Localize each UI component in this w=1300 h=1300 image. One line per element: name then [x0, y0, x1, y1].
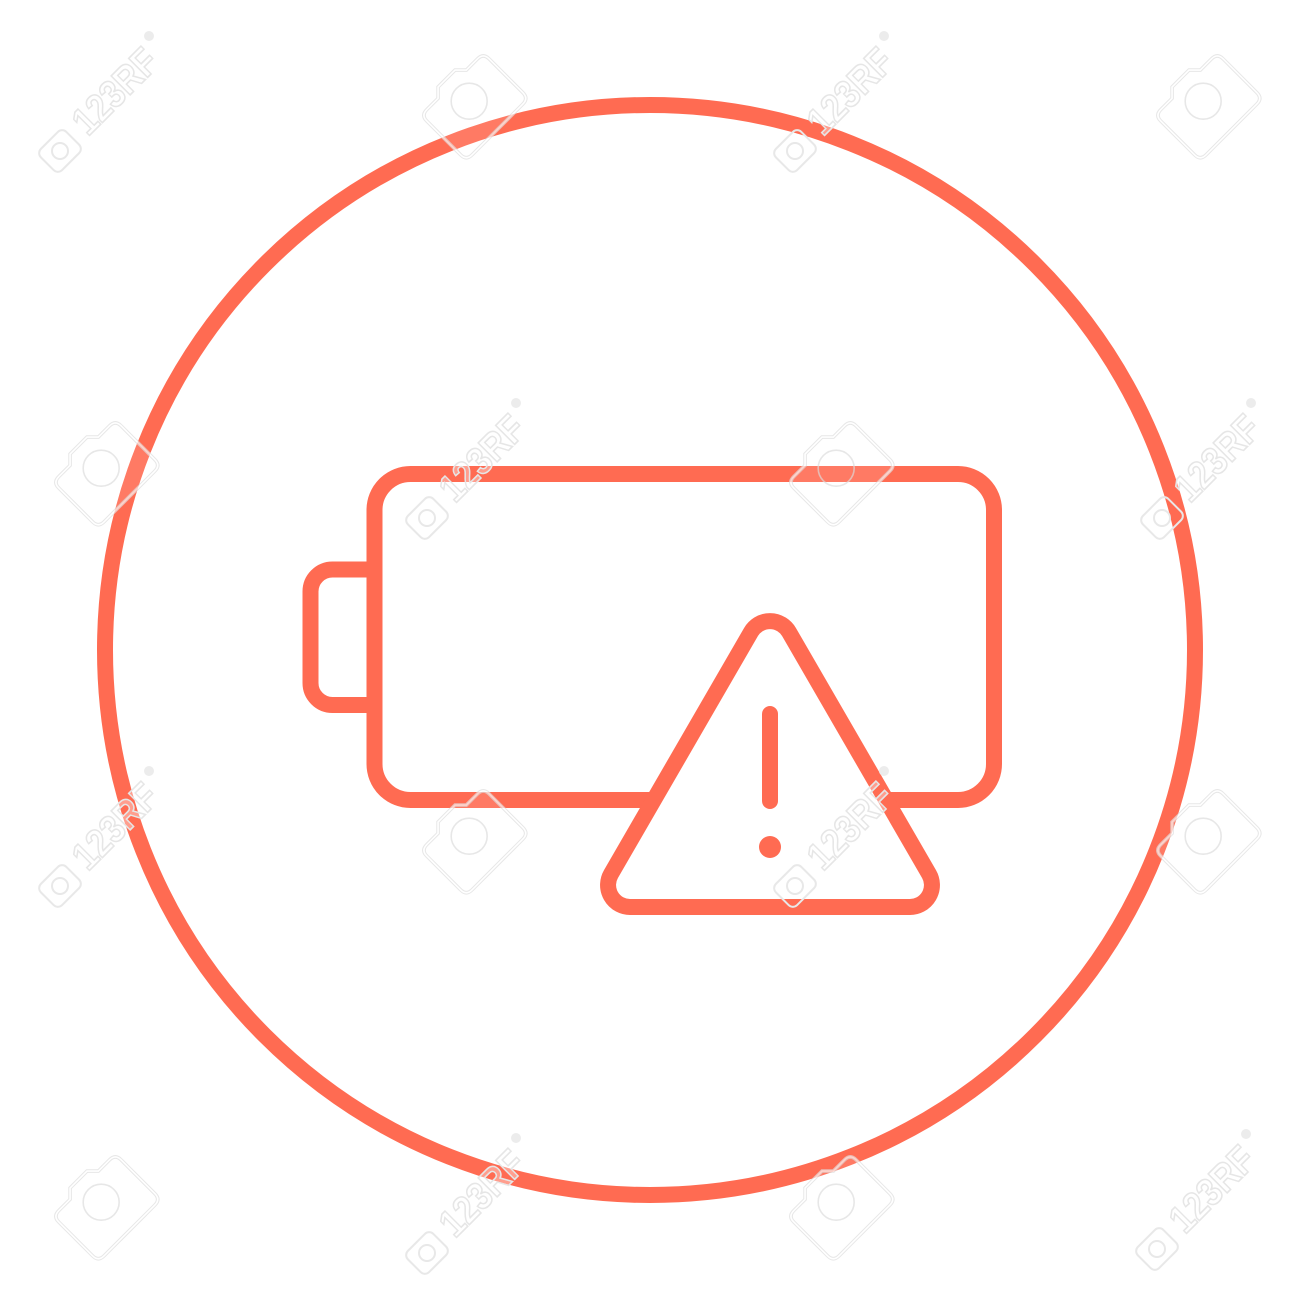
watermark: 123RF top left: [37, 31, 167, 174]
watermark: 123RF bottom right: [1134, 1129, 1264, 1272]
watermark: 123RF upper middle: 123RF: [431, 407, 534, 510]
watermark: 123RF lower centre: 123RF: [799, 775, 902, 878]
watermark: 123RF upper middle: [404, 398, 534, 541]
watermark: 123RF upper right: [1139, 398, 1269, 541]
icon: battery body: [374, 474, 994, 800]
icon: warning triangle: [608, 621, 932, 907]
watermark: camera icon 2: [1149, 47, 1263, 161]
watermark: 123RF lower left: 123RF: [64, 775, 167, 878]
watermark: 123RF upper right: 123RF: [1166, 407, 1269, 510]
watermark: camera icon 4: [782, 414, 896, 528]
watermark: camera icon 3: [47, 414, 161, 528]
icon: battery terminal: [310, 570, 374, 705]
watermark: camera icon 8: [782, 1148, 896, 1262]
icon: exclamation mark: [759, 714, 781, 858]
watermark: 123RF lower centre: [772, 766, 902, 909]
watermark: 123RF bottom right: 123RF: [1161, 1138, 1264, 1241]
watermark: camera icon 1: [415, 47, 529, 161]
watermark: camera icon 7: [47, 1148, 161, 1262]
watermark: 123RF top left: 123RF: [64, 40, 167, 143]
watermark: camera icon 5: [415, 782, 529, 896]
outer circle: [105, 105, 1195, 1195]
watermark: camera icon 6: [1149, 782, 1263, 896]
watermark: 123RF top centre: [772, 31, 902, 174]
watermark: 123RF top centre: 123RF: [799, 40, 902, 143]
watermark: 123RF bottom middle: 123RF: [431, 1142, 534, 1245]
watermark: 123RF lower left: [37, 766, 167, 909]
watermark: 123RF bottom middle: [404, 1133, 534, 1276]
